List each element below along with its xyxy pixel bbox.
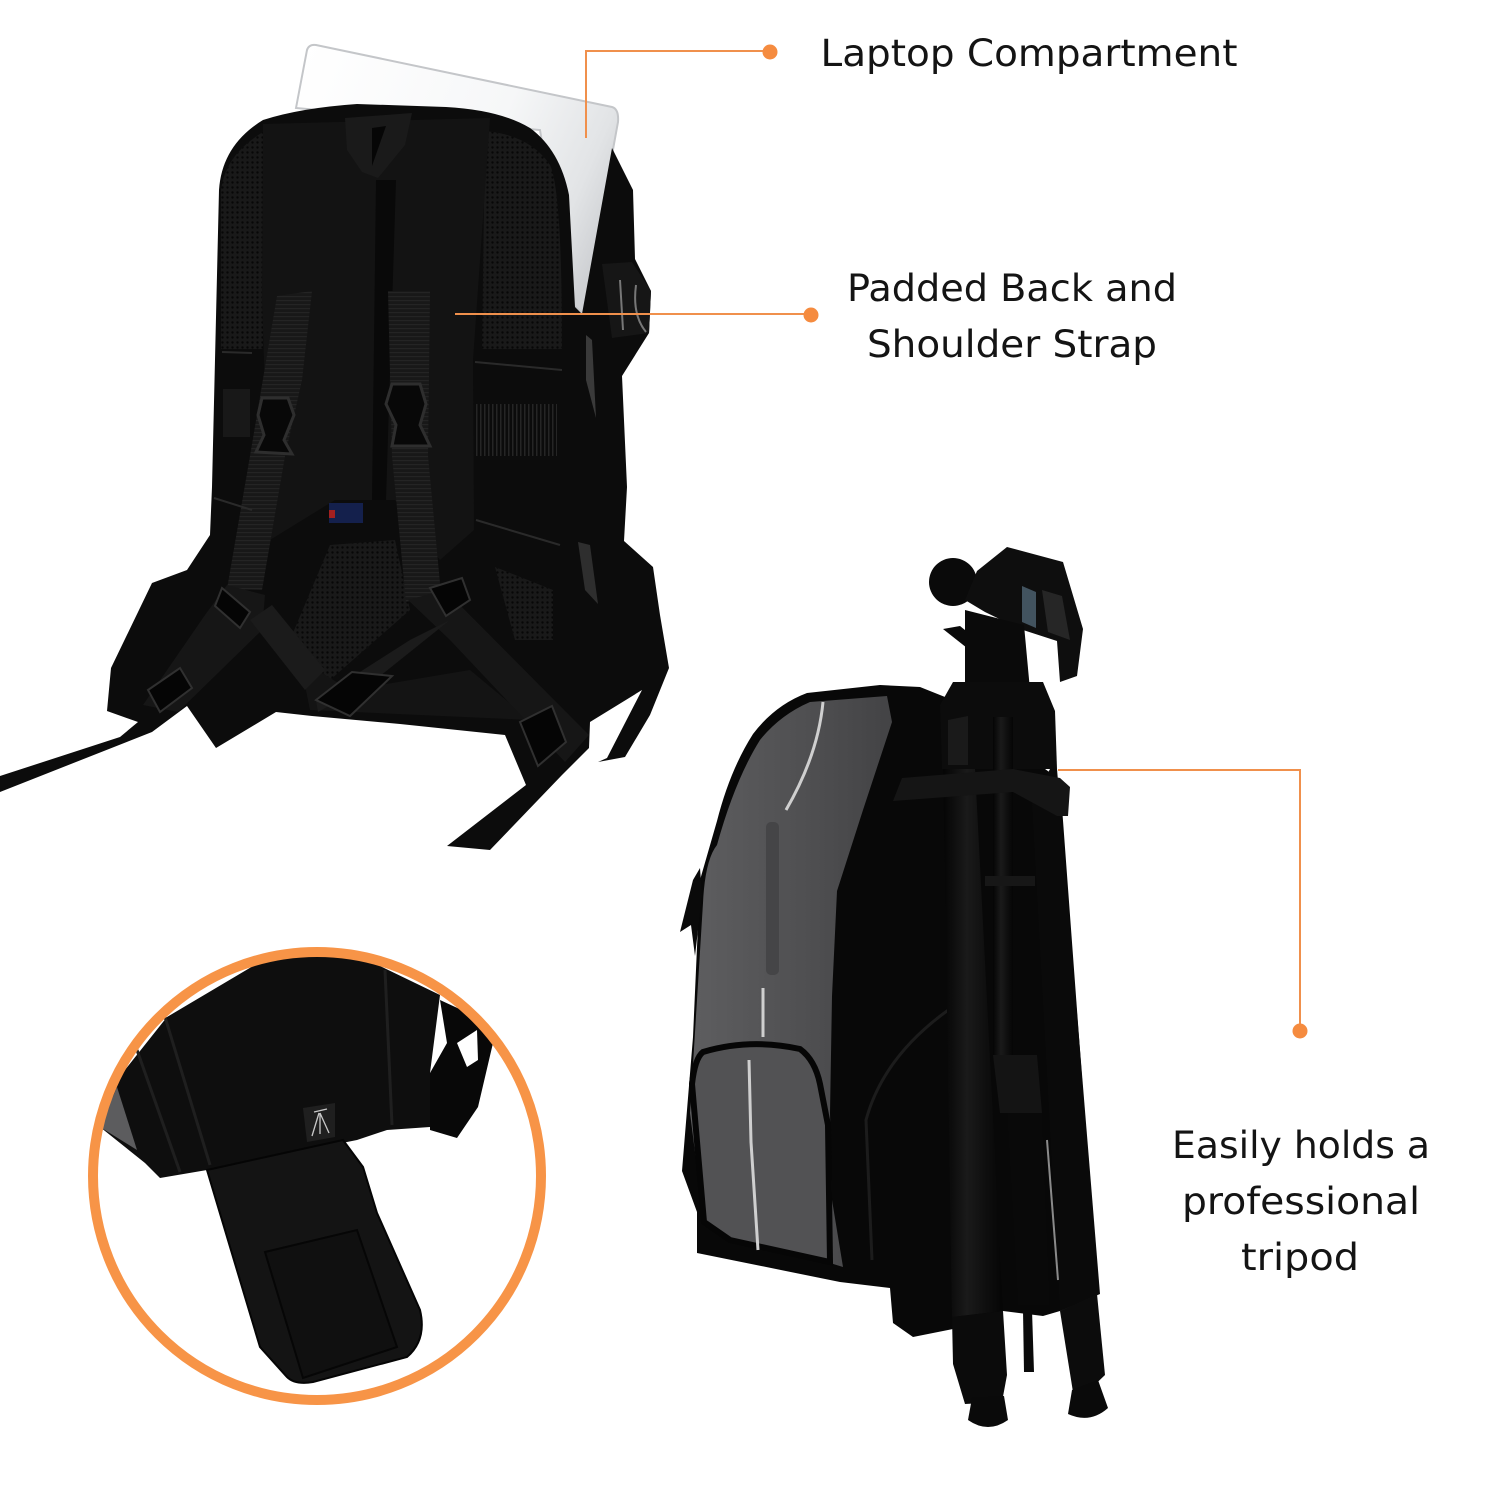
leg clamp xyxy=(985,876,1035,886)
centre hook xyxy=(1023,1310,1034,1372)
top handle xyxy=(345,113,412,178)
grey front panel xyxy=(690,696,892,1267)
padded shoulder panel xyxy=(262,118,490,560)
tripod head xyxy=(929,547,1083,769)
embossed brand mark xyxy=(766,822,779,975)
right mesh panel xyxy=(482,131,562,349)
callout: padded back and shoulder strap xyxy=(455,267,1177,366)
photo: backpack with tripod xyxy=(680,547,1108,1427)
webbing band right xyxy=(475,404,557,456)
right shoulder strap xyxy=(388,291,441,602)
laptop xyxy=(296,45,618,314)
side seam xyxy=(137,970,392,1172)
tripod tag xyxy=(303,1103,335,1142)
backpack black shell xyxy=(682,685,1098,1337)
callout: padded back and shoulder strap: Padded Back and xyxy=(847,267,1177,310)
side strap xyxy=(430,1000,493,1138)
tripod legs xyxy=(893,717,1108,1427)
side panel seam xyxy=(866,1000,963,1260)
backpack silhouette xyxy=(0,104,669,850)
inset: trolley strap detail xyxy=(93,950,541,1400)
tripod strap xyxy=(893,769,1070,816)
leader line xyxy=(455,313,811,315)
grey corner xyxy=(100,1087,137,1150)
left zipper pull xyxy=(680,868,702,956)
callout: tripod xyxy=(1058,770,1430,1279)
callout: tripod: tripod xyxy=(1241,1236,1359,1279)
callout: laptop compartment xyxy=(586,32,1238,138)
sternum straps xyxy=(250,605,325,690)
left mesh panel xyxy=(221,132,263,349)
right buckle xyxy=(386,384,430,446)
left buckle xyxy=(256,398,294,454)
lower mesh panels xyxy=(290,540,410,680)
top zipper pulls xyxy=(586,262,651,418)
leader line xyxy=(586,51,770,138)
callout: laptop compartment: Laptop Compartment xyxy=(820,32,1238,75)
left foot xyxy=(952,1311,1007,1404)
callout: padded back and shoulder strap: Shoulder Strap xyxy=(867,323,1157,366)
strap flap xyxy=(207,1140,422,1383)
brand label xyxy=(329,503,363,523)
strap sliders xyxy=(148,578,566,766)
webbing band left xyxy=(223,389,250,437)
callout: tripod: Easily holds a xyxy=(1172,1124,1430,1167)
lower zipper pull xyxy=(578,542,598,604)
pocket seams xyxy=(214,352,562,545)
leader line xyxy=(1058,770,1300,1031)
photo: backpack rear view with laptop xyxy=(0,45,669,850)
front pocket xyxy=(692,1044,830,1262)
right foot xyxy=(1060,1294,1105,1396)
reflective stripes xyxy=(749,702,823,1250)
bag underside xyxy=(95,950,440,1178)
flap pocket xyxy=(265,1230,397,1378)
left shoulder strap xyxy=(227,291,312,590)
callout: tripod: professional xyxy=(1182,1180,1420,1223)
